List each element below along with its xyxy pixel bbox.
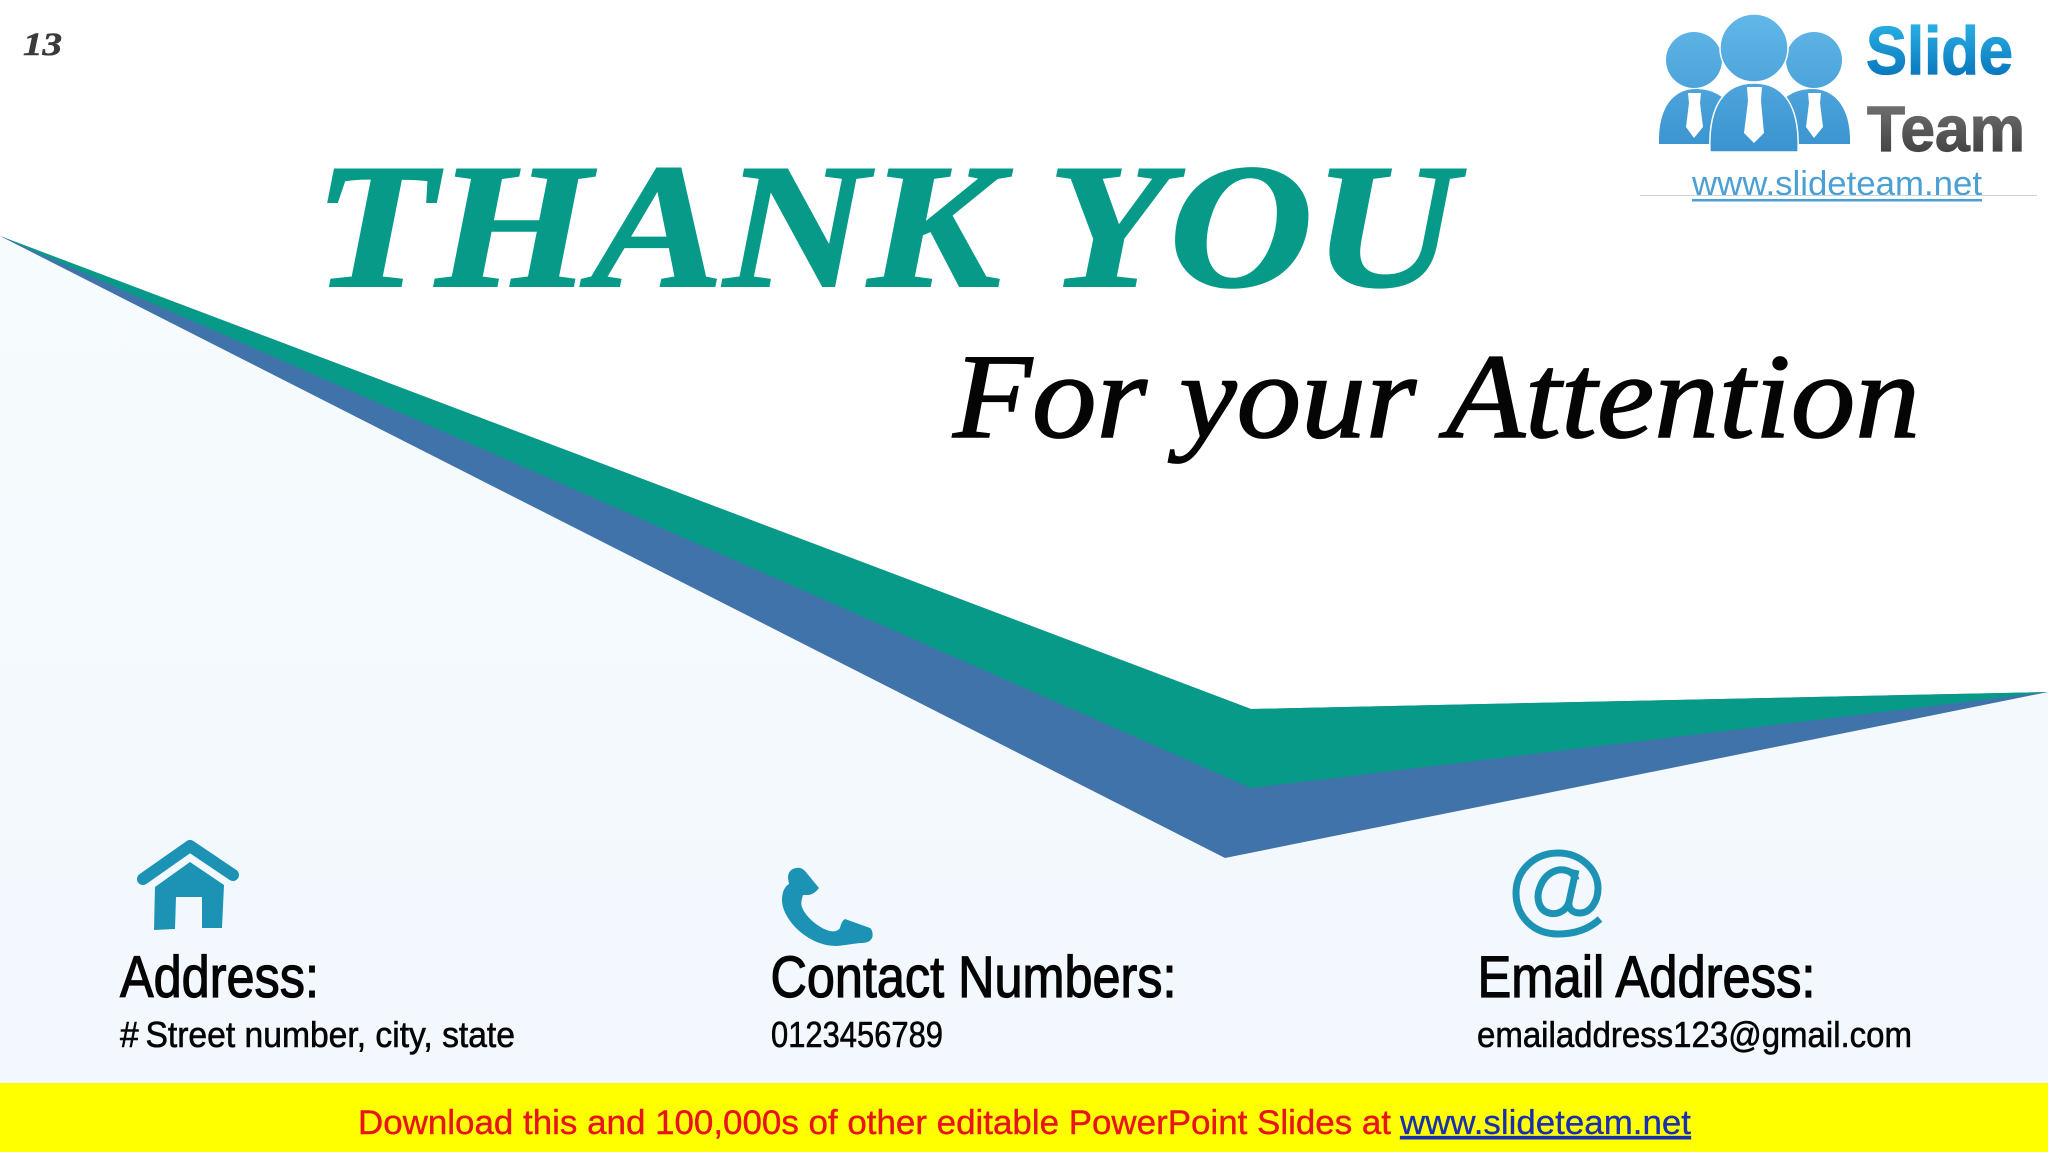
contact block <box>770 945 1176 1055</box>
logo word: team: Team <box>1867 93 2025 165</box>
banner text: Download this and 100,000s of other editable PowerPoint Slides at <box>358 1104 1392 1142</box>
address block: # Street number, city, state <box>120 1014 515 1055</box>
subtitle: for your attention: For your Attention <box>952 330 1920 464</box>
address block: Address: <box>120 945 319 1010</box>
background panel <box>0 236 2048 1084</box>
blue chevron band <box>0 236 2048 858</box>
icon: at sign <box>1516 853 1600 934</box>
logo ties <box>1686 87 1823 143</box>
email block <box>1477 945 1912 1055</box>
slide number: 13 <box>23 27 62 63</box>
teal chevron band <box>0 236 2048 788</box>
icon: house <box>143 846 233 930</box>
email block: Email Address: <box>1478 945 1816 1010</box>
title: thank you: THANK YOU <box>314 127 1466 325</box>
address block <box>120 945 515 1055</box>
logo: slideteam <box>1640 0 2037 203</box>
contact block: Contact Numbers: <box>770 945 1176 1010</box>
logo people icon <box>1659 14 1850 152</box>
icon: phone <box>782 868 873 946</box>
logo word: slide: Slide <box>1866 13 2013 89</box>
email block: emailaddress123@gmail.com <box>1477 1014 1912 1055</box>
logo url: www.slideteam.net <box>1691 165 1983 203</box>
download banner <box>0 1083 2048 1152</box>
banner link: www.slideteam.net <box>1399 1104 1692 1142</box>
contact block: 0123456789 <box>771 1014 943 1055</box>
